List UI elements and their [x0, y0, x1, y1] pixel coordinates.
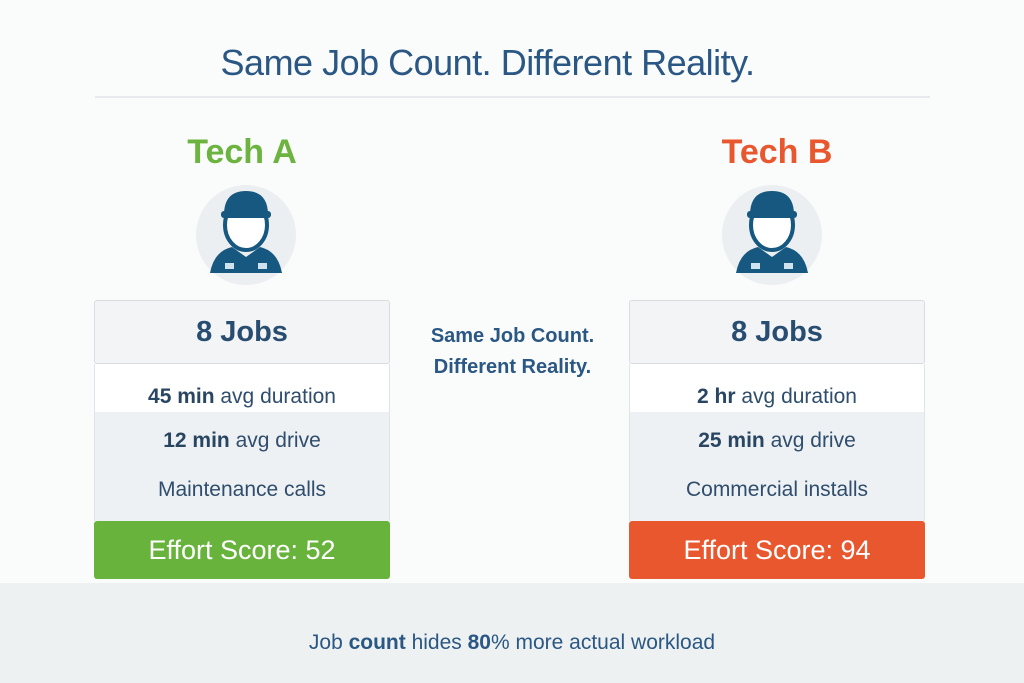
panel: Tech A stats: Maintenance calls	[158, 478, 326, 501]
bottom band	[0, 583, 1024, 683]
panel: Tech A stats: 12 min avg drive	[163, 429, 321, 452]
panel: Tech B stats	[629, 364, 925, 521]
heading: Tech B: Tech B	[722, 133, 832, 171]
panel: Tech A jobs: 8 Jobs	[196, 316, 288, 348]
panel: Tech B stats: 25 min avg drive	[698, 429, 856, 452]
center caption: Different Reality.	[434, 356, 591, 378]
score: Tech A: Effort Score: 52	[148, 535, 336, 565]
footer text: Job count hides 80% more actual workload	[309, 631, 715, 654]
icon: technician A	[196, 185, 296, 285]
heading: Tech A: Tech A	[187, 133, 297, 171]
panel: Tech B jobs: 8 Jobs	[731, 316, 823, 348]
panel: Tech B jobs	[629, 300, 925, 364]
panel: Tech A jobs	[94, 300, 390, 364]
icon: technician B	[722, 185, 822, 285]
panel: Tech A stats: 45 min avg duration	[148, 385, 336, 408]
panel: Tech B stats: 2 hr avg duration	[697, 385, 857, 408]
panel: Tech B stats: Commercial installs	[686, 478, 868, 501]
score: Tech A	[94, 521, 390, 579]
score: Tech B	[629, 521, 925, 579]
panel: Tech A stats	[94, 364, 390, 521]
center caption: Same Job Count.	[431, 325, 594, 347]
center caption	[431, 325, 594, 378]
score: Tech B: Effort Score: 94	[683, 535, 871, 565]
title: Same Job Count. Different Reality.	[221, 42, 754, 83]
